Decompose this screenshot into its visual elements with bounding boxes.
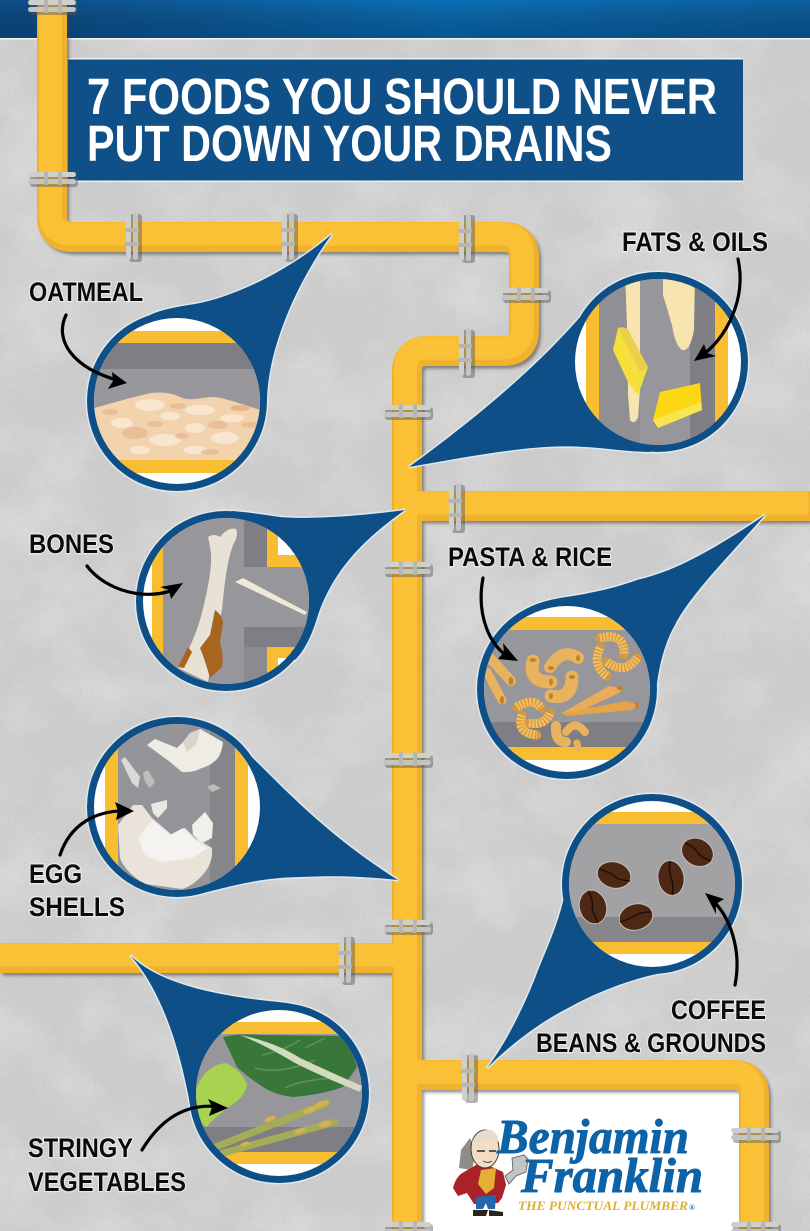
bones scene — [143, 518, 309, 684]
label: coffee: BEANS & GROUNDS — [536, 1028, 766, 1058]
panel: fats and oils callout — [409, 272, 750, 467]
fats scene — [575, 279, 741, 445]
panel: stringy vegetables callout — [130, 955, 370, 1183]
oatmeal scene — [94, 318, 260, 484]
logo figure — [453, 1130, 528, 1216]
logo wordmark: Benjamin — [496, 1109, 689, 1164]
label: pasta and rice: PASTA & RICE — [448, 542, 612, 572]
label: egg shells: EGG — [29, 859, 82, 889]
arrow: stringy vegetables — [142, 1099, 228, 1150]
white logo panel — [422, 1089, 742, 1231]
panel: oatmeal callout — [87, 234, 332, 491]
logo tagline: THE PUNCTUAL PLUMBER — [518, 1198, 688, 1213]
vegetables scene — [196, 1010, 362, 1176]
panel: pasta and rice callout — [477, 515, 765, 780]
title banner — [68, 58, 743, 182]
panel: egg shells callout — [87, 717, 398, 897]
panel: bones callout — [136, 510, 405, 691]
pasta scene — [484, 606, 650, 772]
label: egg shells: SHELLS — [29, 892, 125, 922]
arrow: bones — [87, 566, 183, 599]
logo tagline: ® — [689, 1203, 695, 1212]
arrow: pasta and rice — [481, 578, 518, 661]
egg scene — [94, 724, 260, 890]
logo: Benjamin Franklin — [453, 1109, 703, 1216]
panel: coffee callout — [487, 794, 742, 1068]
top header band — [0, 0, 810, 40]
arrow: oatmeal — [62, 315, 127, 389]
arrow: coffee — [705, 893, 737, 985]
label: coffee: COFFEE — [671, 995, 766, 1025]
logo wordmark: Franklin — [520, 1148, 703, 1203]
label: bones: BONES — [29, 529, 114, 559]
arrow: fats and oils — [694, 259, 740, 361]
arrow: egg shells — [60, 802, 134, 855]
label: stringy vegetables: VEGETABLES — [28, 1167, 186, 1197]
label: stringy vegetables: STRINGY — [28, 1133, 133, 1163]
coffee scene — [565, 798, 740, 970]
label: oatmeal: OATMEAL — [29, 277, 143, 307]
label: fats and oils: FATS & OILS — [622, 227, 768, 257]
title text: PUT DOWN YOUR DRAINS — [87, 115, 612, 172]
